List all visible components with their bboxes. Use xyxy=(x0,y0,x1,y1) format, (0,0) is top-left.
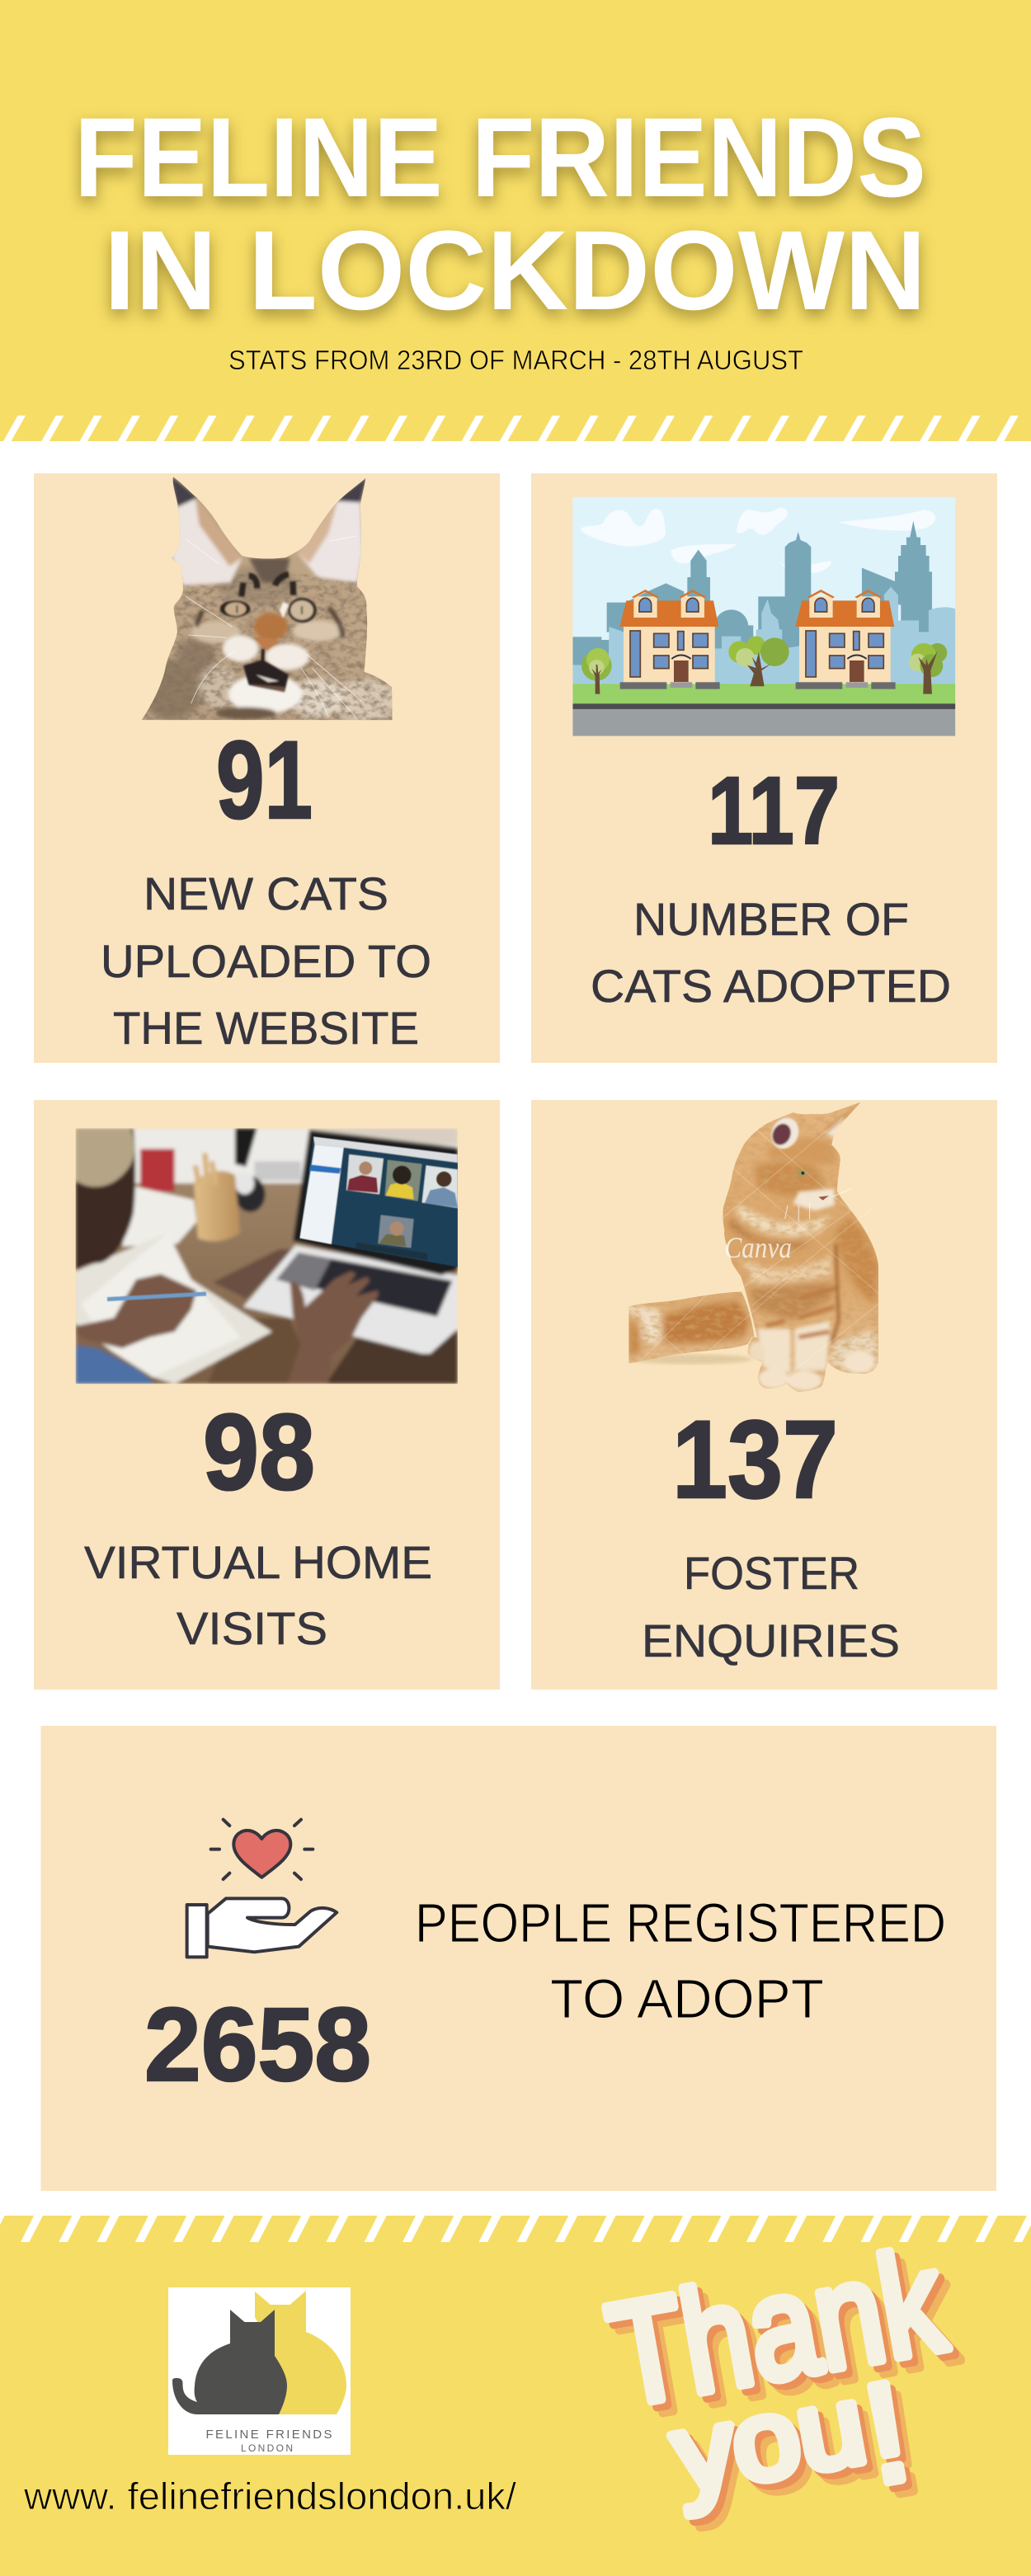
logo: wordmark: FELINE FRIENDS xyxy=(206,2428,332,2442)
number: 91: 91 xyxy=(216,719,313,842)
photo: video call on laptop xyxy=(76,1128,458,1384)
left house xyxy=(619,590,720,689)
photo: ginger cat sitting xyxy=(628,1102,878,1392)
label: foster: FOSTER xyxy=(684,1547,859,1599)
logo xyxy=(168,2287,351,2455)
number: 98: 98 xyxy=(203,1391,315,1512)
watermark: Canva xyxy=(724,1231,792,1264)
logo: yellow cat xyxy=(255,2291,346,2414)
number: 117: 117 xyxy=(708,757,840,864)
panel: people registered xyxy=(41,1726,996,2191)
thank you lettering: Thank xyxy=(598,2220,955,2437)
number: 137: 137 xyxy=(672,1398,838,1521)
label: people registered: PEOPLE REGISTERED xyxy=(415,1892,946,1954)
label: number of: NUMBER OF xyxy=(633,893,909,945)
label: to adopt: TO ADOPT xyxy=(550,1968,824,2030)
label: enquiries: ENQUIRIES xyxy=(642,1615,900,1666)
header band xyxy=(0,0,1031,441)
number: 2658: 2658 xyxy=(144,1986,371,2103)
panel: new cats uploaded xyxy=(34,470,500,1063)
panel: cats adopted xyxy=(531,473,997,1063)
icon: hand holding heart xyxy=(187,1820,337,1957)
panel: virtual home visits xyxy=(34,1100,500,1690)
logo: dark cat xyxy=(172,2310,287,2414)
thank you lettering: ! xyxy=(854,2353,920,2513)
title: FELINE FRIENDS xyxy=(74,95,926,221)
title: IN LOCKDOWN xyxy=(104,208,926,334)
trees xyxy=(581,636,947,694)
thank you lettering: you xyxy=(664,2362,874,2517)
right house xyxy=(795,590,896,689)
logo: london: LONDON xyxy=(241,2442,293,2454)
illustration: street with houses xyxy=(572,497,955,736)
panel: foster enquiries xyxy=(531,1100,997,1690)
label: cats adopted: CATS ADOPTED xyxy=(591,960,951,1012)
title xyxy=(74,95,926,334)
footer band xyxy=(0,2216,1031,2576)
label: new cats: NEW CATS xyxy=(144,867,388,919)
label: uploaded to: UPLOADED TO xyxy=(101,935,431,987)
website url: www. felinefriendslondon.uk/ xyxy=(23,2475,516,2517)
label: visits: VISITS xyxy=(177,1602,327,1654)
thank you lettering xyxy=(598,2220,955,2517)
photo: tabby cat head xyxy=(136,470,400,726)
subtitle: STATS FROM 23RD OF MARCH - 28TH AUGUST xyxy=(228,345,803,375)
label: virtual home: VIRTUAL HOME xyxy=(84,1536,432,1588)
label: the website: THE WEBSITE xyxy=(113,1002,419,1054)
